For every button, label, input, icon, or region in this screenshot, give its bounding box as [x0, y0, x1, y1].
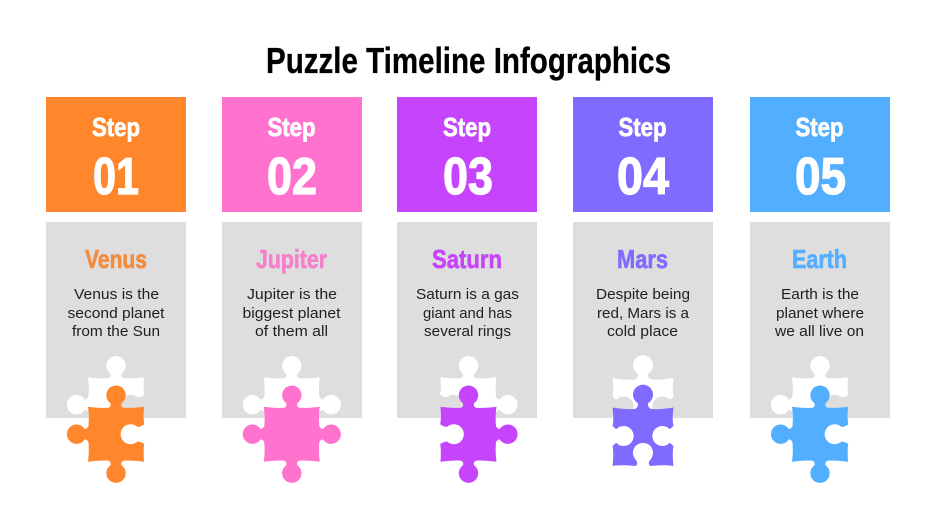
Earth description card — [750, 222, 890, 418]
Jupiter description card — [222, 222, 362, 418]
Mars description card: Mars — [617, 244, 668, 274]
step 01 header box: Step — [92, 112, 140, 142]
Venus description card — [46, 222, 186, 418]
Jupiter description card: biggest planet — [242, 305, 341, 322]
Mars description card — [573, 222, 713, 418]
step 05 header box: 05 — [795, 148, 846, 206]
step 05 header box — [750, 97, 890, 212]
step 04 header box: 04 — [617, 148, 669, 206]
Earth description card: planet where — [776, 305, 864, 322]
Earth description card: Earth — [792, 244, 847, 274]
icon: white puzzle piece — [612, 355, 674, 436]
Mars description card: Despite being — [596, 286, 690, 303]
step 03 header box — [397, 97, 537, 212]
icon: white puzzle piece — [243, 356, 341, 453]
Saturn description card — [397, 222, 537, 418]
panel: step 02 Jupiter — [222, 97, 362, 483]
step 01 header box: 01 — [93, 148, 139, 206]
icon: violet puzzle piece — [612, 385, 674, 466]
icon: purple puzzle piece — [440, 386, 518, 483]
Earth description card: Earth is the — [781, 286, 859, 303]
Mars description card: cold place — [607, 323, 678, 340]
step 02 header box — [222, 97, 362, 212]
step 04 header box: Step — [618, 112, 666, 142]
Venus description card: second planet — [68, 305, 165, 322]
Venus description card: from the Sun — [72, 323, 160, 340]
title: Puzzle Timeline Infographics — [266, 40, 671, 81]
Venus description card: Venus is the — [74, 286, 159, 303]
step 04 header box — [573, 97, 713, 212]
icon: white puzzle piece — [771, 356, 848, 453]
step 03 header box: Step — [443, 112, 491, 142]
Jupiter description card: Jupiter — [256, 244, 327, 274]
icon: white puzzle piece — [440, 356, 518, 453]
Earth description card: we all live on — [774, 323, 864, 340]
panel: step 01 Venus — [46, 97, 186, 483]
panel: step 04 Mars — [573, 97, 713, 466]
panel: step 05 Earth — [750, 97, 890, 483]
step 03 header box: 03 — [443, 148, 493, 206]
Saturn description card: Saturn is a gas — [416, 286, 519, 303]
step 02 header box: Step — [268, 112, 316, 142]
step 05 header box: Step — [796, 112, 844, 142]
Venus description card: Venus — [85, 244, 147, 274]
Saturn description card: several rings — [424, 323, 511, 340]
step 01 header box — [46, 97, 186, 212]
Jupiter description card: of them all — [255, 323, 328, 340]
Mars description card: red, Mars is a — [597, 305, 690, 322]
icon: orange puzzle piece — [67, 386, 144, 483]
icon: blue puzzle piece — [771, 386, 848, 483]
Jupiter description card: Jupiter is the — [247, 286, 337, 303]
Saturn description card: giant and has — [423, 305, 512, 322]
Saturn description card: Saturn — [432, 244, 502, 274]
icon: pink puzzle piece — [243, 386, 341, 483]
panel: step 03 Saturn — [397, 97, 537, 483]
icon: white puzzle piece — [67, 356, 144, 453]
step 02 header box: 02 — [267, 148, 317, 206]
